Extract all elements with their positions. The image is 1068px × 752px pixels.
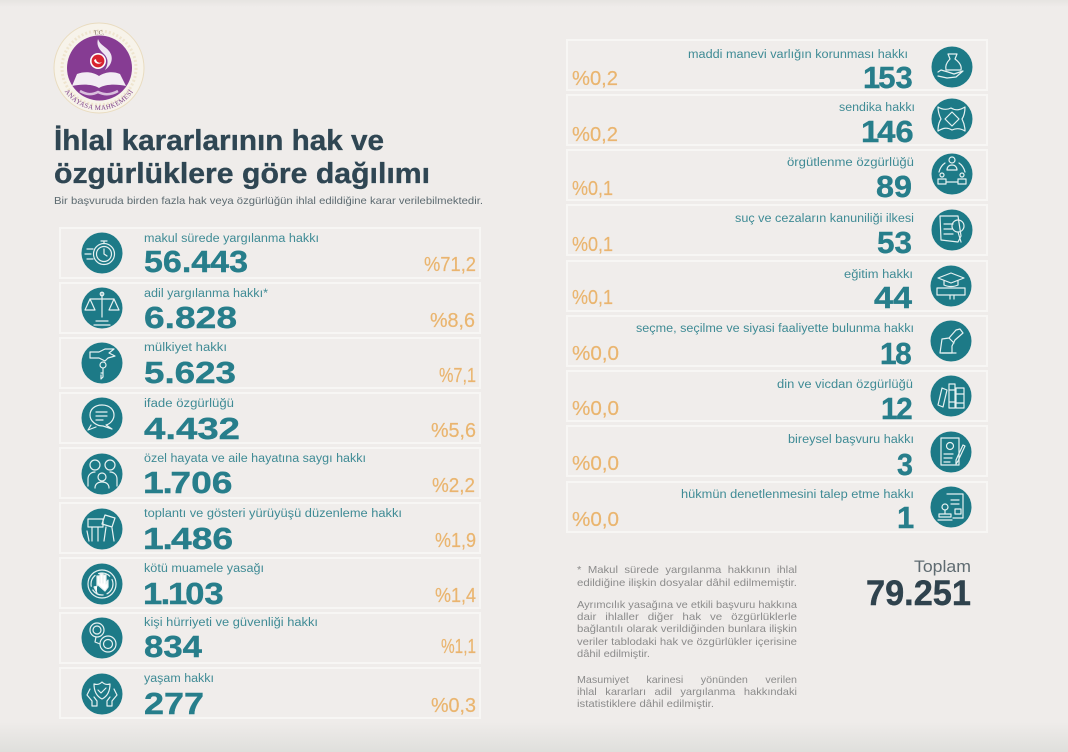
title: İhlal kararlarının hak ve [54, 125, 384, 157]
row: özel hayata ve aile hayatına saygı hakkı: 1.706 [143, 466, 232, 500]
icon: money bag in hand [938, 54, 963, 78]
row: yaşam hakkı: %0,3 [431, 695, 476, 717]
row: din ve vicdan özgürlüğü: din ve vicdan özgürlüğü [777, 379, 913, 391]
footnotes: veriler tablodaki hak ve özgürlükler içerisine [577, 637, 797, 648]
row: din ve vicdan özgürlüğü: 12 [881, 391, 913, 426]
row: örgütlenme özgürlüğü: örgütlenme özgürlüğü [787, 157, 914, 169]
row: bireysel başvuru hakkı: %0,0 [572, 453, 619, 475]
row: suç ve cezaların kanuniliği ilkesi: %0,1 [572, 234, 613, 256]
row: mülkiyet hakkı: 5.623 [144, 355, 236, 390]
footnotes: edildiğine ilişkin dosyalar dâhil edilmemiştir. [577, 578, 797, 589]
row: bireysel başvuru hakkı [567, 426, 987, 482]
row: ifade özgürlüğü: ifade özgürlüğü [144, 398, 234, 410]
row: sendika hakkı: %0,2 [572, 124, 618, 146]
row: örgütlenme özgürlüğü: %0,1 [572, 178, 613, 200]
row: yaşam hakkı: yaşam hakkı [144, 673, 214, 685]
footnotes: Masumiyet karinesi yönünden verilen [577, 675, 797, 686]
icon: application form and pen [941, 438, 965, 465]
title: özgürlüklere göre dağılımı [54, 158, 430, 190]
logo: Anayasa Mahkemesi emblem [54, 22, 144, 114]
icon: handcuffs [90, 623, 116, 652]
row: ifade özgürlüğü: %5,6 [431, 420, 476, 442]
icon: hands with shield [87, 682, 117, 706]
footnotes: Ayrımcılık yasağına ve etkili başvuru hakkına [577, 600, 797, 611]
icon: graduation cap and diploma [937, 273, 965, 299]
row: maddi manevi varlığın korunması hakkı: maddi manevi varlığın korunması hakkı [688, 49, 908, 61]
row: makul sürede yargılanma hakkı [60, 228, 480, 279]
row: özel hayata ve aile hayatına saygı hakkı: özel hayata ve aile hayatına saygı hakkı [144, 453, 366, 465]
row: özel hayata ve aile hayatına saygı hakkı: %2,2 [432, 475, 475, 497]
row: eğitim hakkı: eğitim hakkı [844, 269, 913, 281]
row: seçme, seçilme ve siyasi faaliyette bulunma hakkı: %0,0 [572, 343, 619, 365]
logo: Anayasa Mahkemesi emblem: T.C. [94, 30, 105, 36]
row: hükmün denetlenmesini talep etme hakkı [567, 482, 987, 535]
row: adil yargılanma hakkı: %8,6 [430, 310, 475, 332]
icon: joined hands [938, 107, 965, 131]
icon: stop hand [88, 570, 116, 598]
footnotes: dair ihlaller diğer hak ve özgürlüklerle [577, 612, 797, 623]
row: kişi hürriyeti ve güvenliği hakkı: %1,1 [441, 636, 476, 658]
footnotes: istatistiklere dâhil edilmiştir. [577, 699, 714, 710]
row: suç ve cezaların kanuniliği ilkesi [567, 205, 987, 260]
total: 79.251 [866, 574, 971, 613]
row: din ve vicdan özgürlüğü [567, 371, 987, 426]
title [54, 125, 430, 190]
row: hükmün denetlenmesini talep etme hakkı: %0,0 [572, 509, 619, 531]
panel: left list of rights [60, 228, 480, 721]
row: seçme, seçilme ve siyasi faaliyette bulunma hakkı [567, 316, 987, 371]
row: kötü muamele yasağı: 1.103 [143, 576, 224, 611]
row: ifade özgürlüğü [60, 393, 480, 446]
row: bireysel başvuru hakkı: 3 [897, 447, 913, 482]
row: adil yargılanma hakkı: 6.828 [144, 300, 237, 335]
row: mülkiyet hakkı: %7,1 [439, 365, 476, 387]
row: seçme, seçilme ve siyasi faaliyette bulunma hakkı: 18 [880, 336, 912, 371]
row: toplantı ve gösteri yürüyüşü düzenleme hakkı [60, 503, 480, 556]
icon: protest signs [87, 515, 115, 541]
row: makul sürede yargılanma hakkı: makul sürede yargılanma hakkı [144, 233, 319, 245]
row: yaşam hakkı: 277 [144, 686, 204, 721]
icon: ballot in hand [940, 329, 963, 353]
footnotes: dâhil edilmiştir. [577, 649, 650, 660]
row: yaşam hakkı [60, 668, 480, 721]
row: kişi hürriyeti ve güvenliği hakkı: 834 [144, 629, 203, 664]
footnotes: * Makul sürede yargılanma hakkının ihlal [577, 565, 797, 576]
row: din ve vicdan özgürlüğü: %0,0 [572, 398, 619, 420]
row: maddi manevi varlığın korunması hakkı: 153 [863, 60, 913, 95]
row: sendika hakkı: 146 [861, 114, 914, 149]
row: hükmün denetlenmesini talep etme hakkı: 1 [897, 500, 914, 535]
row: suç ve cezaların kanuniliği ilkesi: suç ve cezaların kanuniliği ilkesi [735, 213, 914, 225]
row: sendika hakkı [567, 95, 987, 149]
row: bireysel başvuru hakkı: bireysel başvuru hakkı [788, 434, 914, 446]
row: adil yargılanma hakkı: adil yargılanma hakkı* [144, 288, 269, 300]
icon: hand with key [90, 349, 115, 379]
row: kötü muamele yasağı: %1,4 [435, 585, 476, 607]
row: toplantı ve gösteri yürüyüşü düzenleme hakkı: %1,9 [435, 530, 476, 552]
row: örgütlenme özgürlüğü: 89 [876, 169, 912, 204]
icon: stopwatch [85, 241, 114, 264]
footnotes: ihlal kararları adil yargılanma hakkındaki [577, 687, 797, 698]
row: adil yargılanma hakkı [60, 283, 480, 335]
row: kişi hürriyeti ve güvenliği hakkı [60, 613, 480, 664]
row: mülkiyet hakkı: mülkiyet hakkı [144, 342, 227, 354]
row: kötü muamele yasağı [60, 558, 480, 611]
row: maddi manevi varlığın korunması hakkı [567, 40, 987, 95]
logo: Anayasa Mahkemesi emblem: ANAYASA MAHKEMESİ [64, 89, 133, 110]
footnotes: bağlantılı olarak verildiğinden bunlara ilişkin [577, 624, 797, 635]
icon: organised people [938, 157, 966, 184]
row: sendika hakkı: sendika hakkı [839, 102, 915, 114]
row: hükmün denetlenmesini talep etme hakkı: hükmün denetlenmesini talep etme hakkı [681, 489, 914, 501]
icon: family [88, 460, 117, 488]
icon: document with magnifier [940, 216, 964, 242]
row: eğitim hakkı [567, 261, 987, 315]
footnotes [577, 565, 797, 710]
row: kötü muamele yasağı: kötü muamele yasağı [144, 563, 264, 575]
icon: speech bubbles [88, 405, 114, 430]
row: makul sürede yargılanma hakkı: %71,2 [424, 254, 476, 276]
row: seçme, seçilme ve siyasi faaliyette bulunma hakkı: seçme, seçilme ve siyasi faaliyette bulunma hakkı [636, 323, 914, 335]
row: mülkiyet hakkı [60, 338, 480, 390]
subtitle: Bir başvuruda birden fazla hak veya özgürlüğün ihlal edildiğine karar verilebilmektedir. [54, 195, 483, 207]
total [866, 557, 971, 613]
row: özel hayata ve aile hayatına saygı hakkı [60, 448, 480, 500]
row: eğitim hakkı: %0,1 [572, 287, 613, 309]
icon: stamp and document [938, 494, 963, 520]
row: eğitim hakkı: 44 [874, 280, 913, 315]
total: Toplam [914, 557, 971, 576]
panel: right list of rights [567, 40, 987, 535]
icon: books [938, 384, 964, 408]
row: makul sürede yargılanma hakkı: 56.443 [144, 244, 248, 279]
row: ifade özgürlüğü: 4.432 [144, 411, 240, 446]
row: suç ve cezaların kanuniliği ilkesi: 53 [877, 225, 912, 260]
row: maddi manevi varlığın korunması hakkı: %0,2 [572, 68, 618, 90]
row: toplantı ve gösteri yürüyüşü düzenleme hakkı: 1.486 [143, 522, 233, 556]
row: kişi hürriyeti ve güvenliği hakkı: kişi hürriyeti ve güvenliği hakkı [144, 617, 318, 629]
row: toplantı ve gösteri yürüyüşü düzenleme hakkı: toplantı ve gösteri yürüyüşü düzenleme hakkı [144, 508, 402, 520]
icon: scales [85, 292, 119, 325]
row: örgütlenme özgürlüğü [567, 150, 987, 204]
